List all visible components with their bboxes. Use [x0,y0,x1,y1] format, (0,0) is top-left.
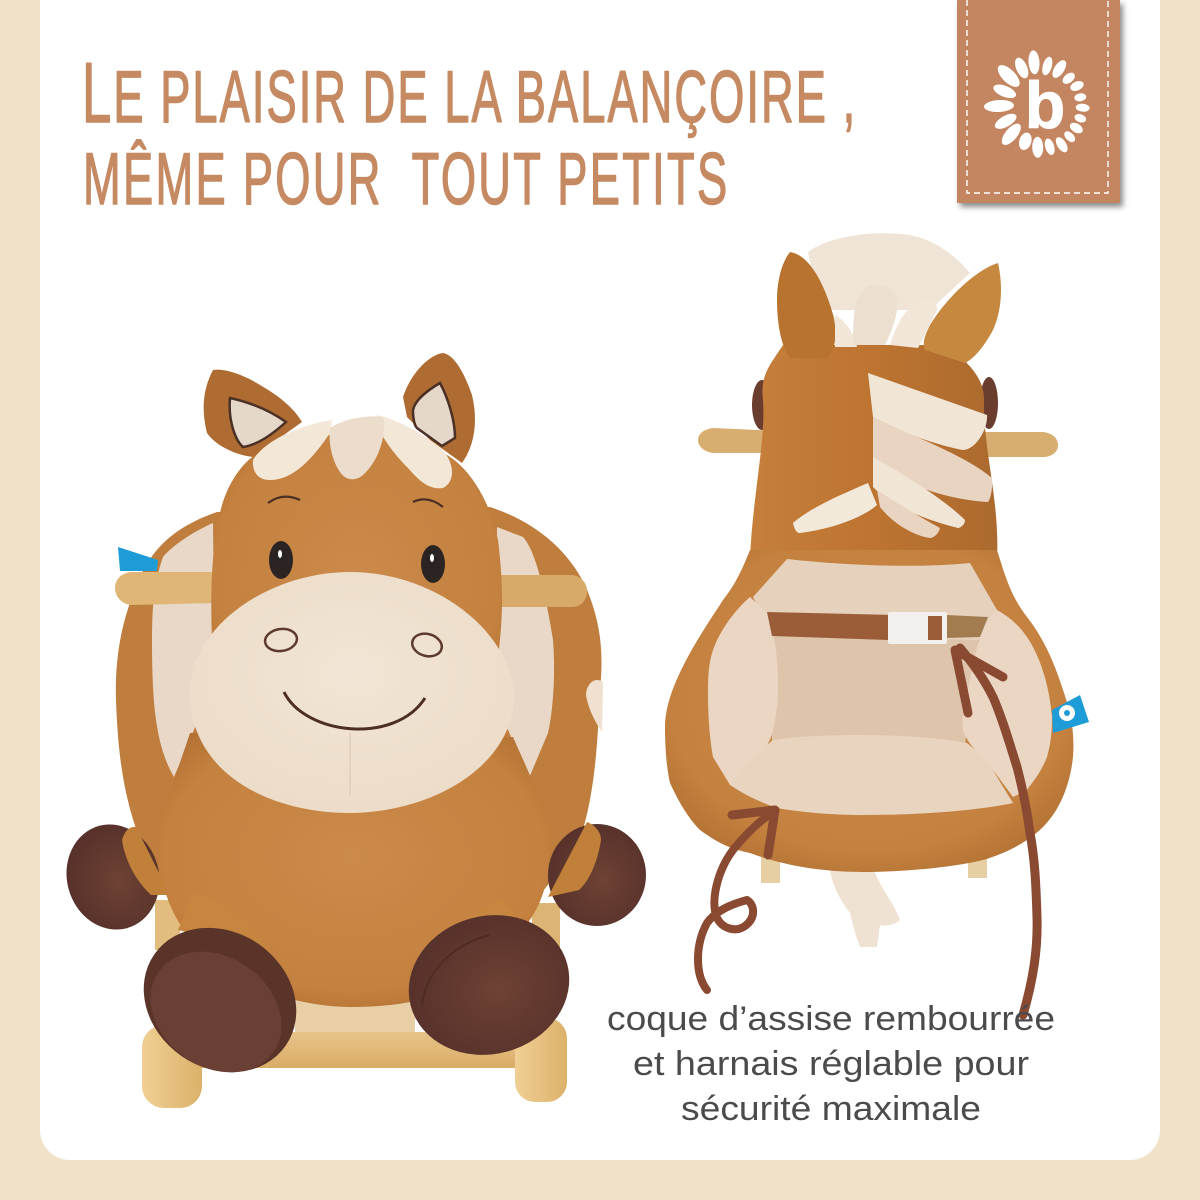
photo: plush rocking horse front view [55,353,646,1108]
caption text: coque d’assise rembourrée [607,1000,1055,1038]
brown cheeks [752,380,772,430]
mane [253,415,452,488]
seat back [770,630,980,745]
arrow: long arrow to harness [955,648,1037,1015]
caption text: sécurité maximale [681,1090,981,1128]
rocker base [142,900,567,1108]
title: LE PLAISIR DE LA BALANÇOIRE , [82,45,855,140]
body [665,550,1073,872]
caption text [607,1000,1055,1128]
head and neck [750,345,997,560]
left cushion [708,597,778,785]
top of head cream [808,233,970,310]
caption text: et harnais réglable pour [633,1045,1029,1083]
left ear [204,370,302,457]
heart patch [586,680,603,732]
seat back top [753,559,997,640]
long mane [793,373,992,538]
title: MÊME POUR TOUT PETITS [83,138,727,220]
handles [115,572,587,607]
seat cushion [730,735,1013,815]
front legs [178,893,272,953]
right ear [924,263,1001,363]
mane between ears [835,286,937,348]
right ear [403,353,475,463]
eyes [268,497,445,583]
blue tag [118,547,158,571]
head [211,434,502,760]
icon: sun logo: b [1025,68,1065,142]
legs and tail [761,850,780,883]
icon: sun logo [984,50,1090,158]
torso [160,733,549,1007]
front right hoof [393,897,585,1073]
left ear [777,252,835,359]
cream side wings [152,523,215,777]
harness strap and buckle [767,612,988,644]
photo: plush rocking horse back/seat view [665,233,1089,947]
muzzle [190,572,514,813]
arrow: curly arrow to padded seat shell [698,810,775,990]
logo tag [957,0,1120,203]
handles [698,428,800,453]
blue tag [1052,695,1089,733]
front left hoof [115,898,325,1102]
right cushion [963,610,1052,797]
back body [116,507,601,895]
title [82,45,855,220]
back right foot [548,822,646,926]
back left foot [55,814,171,940]
